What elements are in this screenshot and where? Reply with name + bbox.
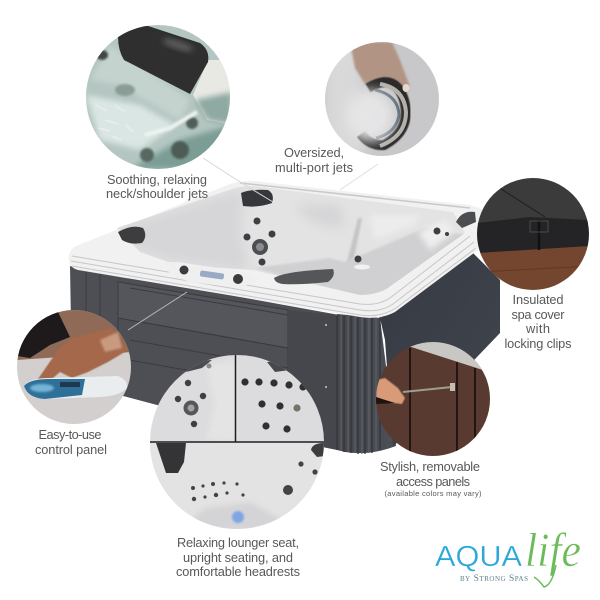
caption: access panels: (available colors may vary): [384, 489, 482, 498]
panel: control panel photo: [17, 310, 132, 425]
tub jets: [244, 218, 449, 270]
tub cabinet: corner ribs: [288, 310, 396, 454]
shadow under hand: [376, 397, 395, 404]
interior basin: [115, 186, 465, 296]
tub cabinet: left face: [70, 266, 345, 450]
panel top edge: [405, 340, 492, 373]
logo word: aqua: AQUA: [435, 541, 523, 573]
leader line: control panel: [128, 292, 187, 330]
jet ring: [361, 82, 406, 146]
caption: neck jets: neck/shoulder jets: [106, 186, 208, 201]
logo tagline: by Strong Spas: [460, 574, 528, 584]
caption: multi-port jets: Oversized,: [284, 145, 344, 160]
panel: spa cover photo: [477, 178, 589, 290]
panel: multi-port jet photo: [325, 42, 439, 156]
caption: multi-port jets: multi-port jets: [275, 160, 353, 175]
pad blue screen: [24, 379, 85, 399]
acrylic shell rim: [69, 181, 492, 318]
hot tub illustration: [69, 181, 500, 454]
logo word: life: life: [525, 524, 581, 577]
lounger floor: [195, 503, 278, 529]
blue light: [232, 511, 244, 523]
leader line: multi-port jets: [340, 164, 378, 190]
brown panel: [376, 342, 491, 457]
headrest highlight: [162, 36, 194, 54]
panel: access panels photo: [376, 340, 492, 457]
seams and clip: [491, 188, 579, 272]
background surface: [17, 310, 132, 425]
caption: spa cover: Insulated: [512, 292, 564, 307]
neck headrest: [118, 25, 208, 94]
water foam: [346, 90, 394, 142]
dark grooves: [410, 348, 475, 457]
foam area: [86, 45, 230, 169]
caption: neck jets: Soothing, relaxing: [107, 172, 207, 187]
submerged jets: [115, 84, 198, 162]
headrests and seats: [118, 190, 476, 284]
logo swoosh: [534, 565, 556, 587]
caption: control panel: [35, 427, 107, 457]
caption: control panel: Easy-to-use: [38, 427, 102, 442]
cover front band: [477, 217, 589, 254]
panel: seating photo collage: [150, 353, 325, 530]
collage dividers: [150, 353, 325, 442]
caption: control panel: control panel: [35, 442, 107, 457]
leader line: neck jets: [203, 158, 273, 202]
caption: spa cover: locking clips: [504, 336, 572, 351]
control console: [165, 262, 258, 288]
top backdrop: [17, 310, 132, 360]
background: [325, 42, 439, 156]
fingernail: [402, 84, 410, 92]
logo: AquaLife: [435, 524, 581, 587]
top-right jets: [241, 360, 307, 433]
small dark jet: [96, 50, 108, 60]
caption: seating: [176, 535, 300, 579]
caption: seating: upright seating, and: [183, 550, 293, 565]
tub cabinet: right face: [380, 253, 500, 447]
screwdriver: [403, 387, 452, 392]
base: [150, 355, 325, 530]
caption: access panels: Stylish, removable: [380, 459, 480, 474]
tub cabinet: wood panel lines: [86, 272, 310, 445]
caption: neck jets: [106, 172, 208, 201]
bottom headrests and jets: [156, 443, 325, 501]
hand highlight: [100, 332, 122, 352]
control pad: [24, 376, 127, 399]
caption: access panels: [380, 459, 482, 498]
cover top: [477, 178, 589, 224]
caption: seating: comfortable headrests: [176, 564, 300, 579]
caption: seating: Relaxing lounger seat,: [177, 535, 299, 550]
water background: [86, 25, 230, 169]
brown side: [477, 246, 589, 290]
caption: access panels: access panels: [396, 474, 470, 489]
foam texture: [95, 105, 134, 140]
hand: [38, 328, 128, 384]
caption: spa cover: [504, 292, 572, 351]
water stream: [145, 112, 197, 135]
dark sleeve: [17, 310, 70, 358]
lounger lower area: [324, 444, 325, 448]
caption: multi-port jets: [275, 145, 353, 175]
hand: [350, 42, 409, 92]
caption: spa cover: with: [525, 321, 550, 336]
hand: [376, 378, 405, 404]
top-left jets: [175, 360, 212, 427]
white side wall: [193, 60, 232, 125]
panel: neck/shoulder jets photo: [86, 25, 232, 169]
caption: spa cover: spa cover: [512, 307, 565, 322]
